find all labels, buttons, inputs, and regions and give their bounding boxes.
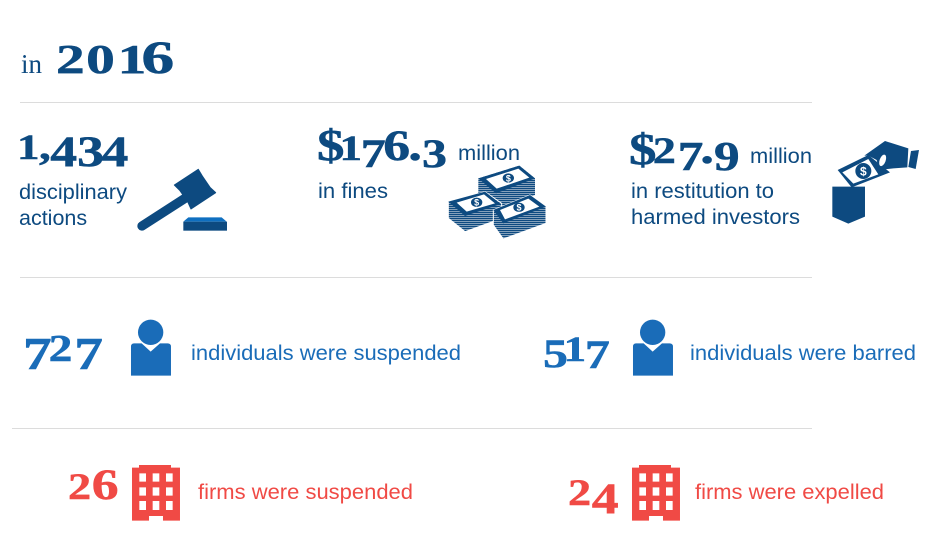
number: $176.3: 7 [361, 132, 386, 176]
number: 517: 7 [585, 333, 610, 377]
number: 1,434: , [39, 126, 51, 168]
number: $176.3: $ [317, 121, 345, 170]
number: 1,434: 1 [17, 127, 40, 167]
number: $176.3: 1 [340, 128, 362, 168]
stat: restitution [629, 124, 812, 229]
number: 1,434: 4 [50, 128, 77, 176]
number: 24: 4 [592, 475, 619, 523]
stat: individuals barred [543, 320, 916, 377]
number: 727: 7 [74, 329, 103, 380]
number: $176.3: 6 [383, 122, 410, 170]
stat: fines [317, 121, 520, 203]
icon: person [633, 320, 673, 376]
stat: individuals suspended [23, 320, 461, 380]
right stack: $ [516, 203, 521, 213]
label: million: million [750, 144, 812, 168]
icon: hand dropping money in pocket [832, 141, 919, 224]
back stack: $ [506, 173, 511, 183]
title: 1 [118, 37, 146, 82]
icon: hand dropping money in pocket: $ [860, 164, 867, 178]
number: $27.9: 7 [678, 135, 703, 180]
label: disciplinary actions: disciplinary [19, 180, 127, 204]
title: 0 [86, 37, 115, 82]
stat: firms expelled [568, 465, 884, 523]
label: million: million [458, 141, 520, 165]
number: 727: 2 [49, 328, 72, 370]
number: $176.3: . [408, 121, 422, 170]
number: $27.9: 9 [714, 135, 740, 180]
number: $27.9: . [700, 124, 714, 173]
label: individuals were suspended [191, 341, 461, 365]
icon: building [632, 465, 680, 521]
number: $27.9: $ [629, 125, 657, 174]
left stack: $ [474, 198, 479, 208]
stat: firms suspended [68, 461, 413, 521]
number: 1,434: 3 [77, 128, 104, 176]
icon: money stacks [448, 166, 546, 239]
number: 1,434: 4 [102, 128, 128, 176]
number: 26: 2 [68, 467, 91, 508]
label: firms were suspended [198, 480, 413, 504]
icon: person [131, 320, 171, 376]
number: 517: 1 [564, 329, 586, 369]
icon: building [132, 465, 180, 521]
label: in restitution to harmed investors: harmed investors [631, 205, 800, 229]
number: 727: 7 [23, 329, 52, 380]
label: firms were expelled [695, 480, 884, 504]
label: in fines: in fines [318, 179, 388, 203]
number: 24: 2 [568, 473, 591, 514]
number: 517: 5 [543, 332, 568, 376]
label: disciplinary actions: actions [19, 206, 87, 230]
number: $176.3: 3 [422, 132, 447, 176]
title: 6 [141, 32, 174, 84]
icon: gavel [142, 169, 227, 231]
label: individuals were barred [690, 341, 916, 365]
label: in restitution to harmed investors: in restitution to [631, 179, 774, 203]
title: 2 [56, 37, 85, 82]
title [21, 32, 174, 84]
number: 26: 6 [92, 461, 119, 509]
title: in [21, 49, 43, 79]
stat: disciplinary actions [17, 126, 128, 230]
number: $27.9: 2 [653, 131, 676, 172]
